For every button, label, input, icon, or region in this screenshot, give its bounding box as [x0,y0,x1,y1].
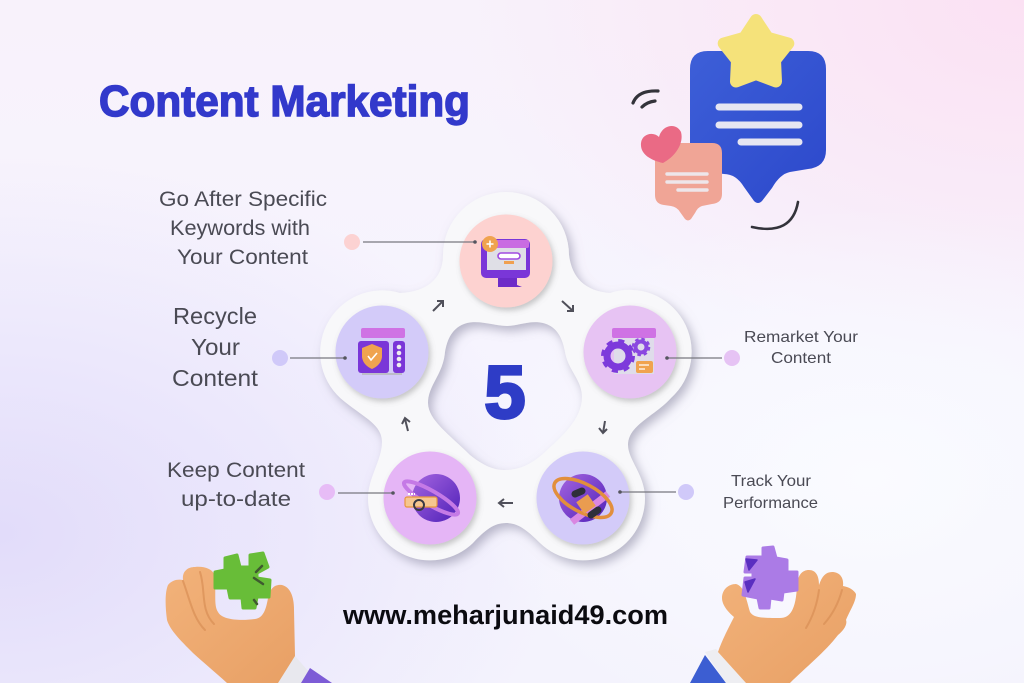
icon: shield window [358,328,405,375]
puzzle shadow [254,566,263,604]
finger creases [806,590,842,628]
illustration: right hand with purple puzzle piece [690,547,856,683]
label: recycle: Recycle [173,303,257,329]
website url: www.meharjunaid49.com [342,600,668,630]
hand [166,567,295,683]
puzzle piece [215,553,270,608]
label: remarket: Content [771,350,832,367]
label: keywords: Go After Specific [159,187,327,211]
arrow: left to top [433,301,443,311]
title: Content Marketing [99,77,470,126]
connector: remarket [665,350,740,366]
connector: recycle [272,350,347,366]
icon: planet with search bar [401,474,461,522]
cuff [690,655,726,683]
label: recycle: Your [191,334,240,360]
connector: keep up to date [319,484,395,500]
label: keywords: Your Content [177,245,308,269]
icon: heart [641,126,682,163]
illustration: chat bubbles [633,20,826,229]
icon: pink bubble text lines [667,174,707,190]
arrows between steps [402,301,607,507]
connector: track [618,484,694,500]
ring background [320,192,692,560]
step circle: right [584,306,676,398]
icon: planet with satellite [548,471,618,525]
label: keep up to date: up-to-date [181,487,291,511]
icon: bubble text lines [719,107,799,142]
illustration: left hand with green puzzle piece [166,553,332,683]
arrow: bottom left to left [402,418,410,431]
step circle: bottom right [536,452,630,544]
icon: yellow star [724,20,788,82]
puzzle shadow [745,559,757,592]
hand [718,570,856,683]
decorative arcs [633,91,798,229]
label: keywords: Keywords with [170,216,310,240]
arrow: right to bottom right [599,421,607,433]
connector: keywords [344,234,477,250]
label: recycle: Content [172,365,259,391]
label: track: Track Your [731,473,812,490]
step circle: top [460,214,552,308]
icon: monitor [481,236,530,287]
finger creases [183,572,214,630]
arrow: top to right [562,301,573,311]
step circle: left [336,306,428,398]
cuff [277,656,309,683]
central number: 5 [484,351,526,434]
puzzle piece [743,547,797,608]
label: remarket [744,329,859,367]
icon: pink speech bubble [655,143,722,220]
label: remarket: Remarket Your [744,329,859,346]
icon: gears window [603,328,656,374]
arrow: bottom right to bottom left [499,499,513,507]
label: keywords [159,187,327,269]
label: keep up to date [167,458,305,511]
icon: blue speech bubble [690,51,826,203]
label: keep up to date: Keep Content [167,458,305,482]
diagram: five-step ring [320,192,692,560]
label: recycle [172,303,259,391]
label: track [723,473,818,512]
step circle: bottom left [384,452,476,544]
label: track: Performance [723,495,818,512]
